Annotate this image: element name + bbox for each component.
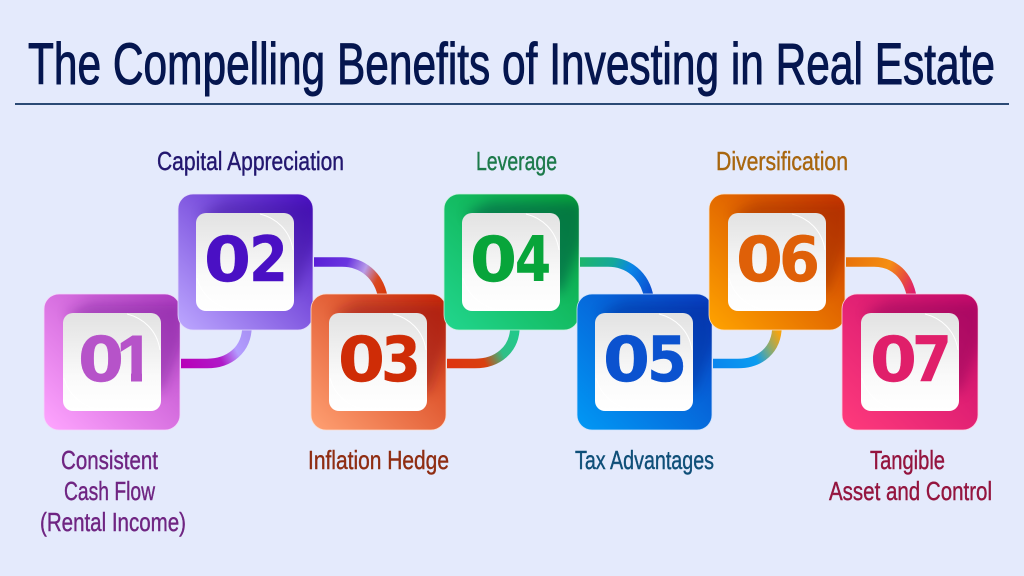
number 02: 0	[204, 223, 251, 296]
number 05	[603, 323, 687, 396]
step 05 box	[577, 294, 716, 430]
connector: 04 to 05	[580, 262, 649, 298]
number 01: 0	[78, 323, 124, 396]
label: Leverage: Leverage	[476, 146, 557, 176]
connector: 06 to 07	[846, 262, 912, 298]
number 02: 2	[249, 223, 288, 296]
number 04: 4	[515, 223, 551, 296]
number 02	[204, 223, 288, 296]
connector: 01 to 02	[181, 326, 247, 364]
number 04: 0	[470, 223, 517, 296]
step 01 box	[44, 294, 184, 430]
label: Consistent Cash Flow (Rental Income): (Rental Income)	[40, 507, 186, 537]
number 03: 3	[381, 323, 421, 396]
step 03 box	[311, 294, 450, 430]
label: Tangible Asset and Control	[829, 445, 992, 506]
connector: 02 to 03	[314, 262, 383, 298]
label: Tax Advantages: Tax Advantages	[575, 445, 714, 475]
number 04	[470, 223, 551, 296]
number 07: 7	[912, 323, 952, 396]
number 07: 0	[870, 323, 917, 396]
number 03: 0	[338, 323, 385, 396]
number 01: 1	[117, 322, 153, 395]
connector: 05 to 06	[713, 326, 777, 364]
number 05: 5	[647, 323, 687, 396]
number 06: 0	[736, 223, 783, 296]
step 07 box	[842, 294, 982, 430]
step 04 box	[444, 194, 583, 330]
step 02 box	[178, 194, 317, 330]
number 05: 0	[603, 323, 650, 396]
label: Diversification: Diversification	[716, 146, 848, 176]
number 01	[80, 334, 142, 382]
label: Consistent Cash Flow (Rental Income)	[40, 445, 186, 537]
number 07	[870, 323, 952, 396]
label: Tangible Asset and Control: Tangible	[870, 445, 945, 475]
number 06	[736, 223, 820, 296]
connector: 03 to 04	[447, 326, 515, 364]
number 03	[338, 323, 421, 396]
label: Inflation Hedge: Inflation Hedge	[308, 445, 449, 475]
label: Consistent Cash Flow (Rental Income): Cash Flow	[64, 476, 155, 506]
step 06 box	[709, 194, 849, 330]
label: Consistent Cash Flow (Rental Income): Consistent	[61, 445, 159, 475]
label: Capital Appreciation: Capital Appreciation	[157, 146, 344, 176]
number 06: 6	[779, 223, 820, 296]
